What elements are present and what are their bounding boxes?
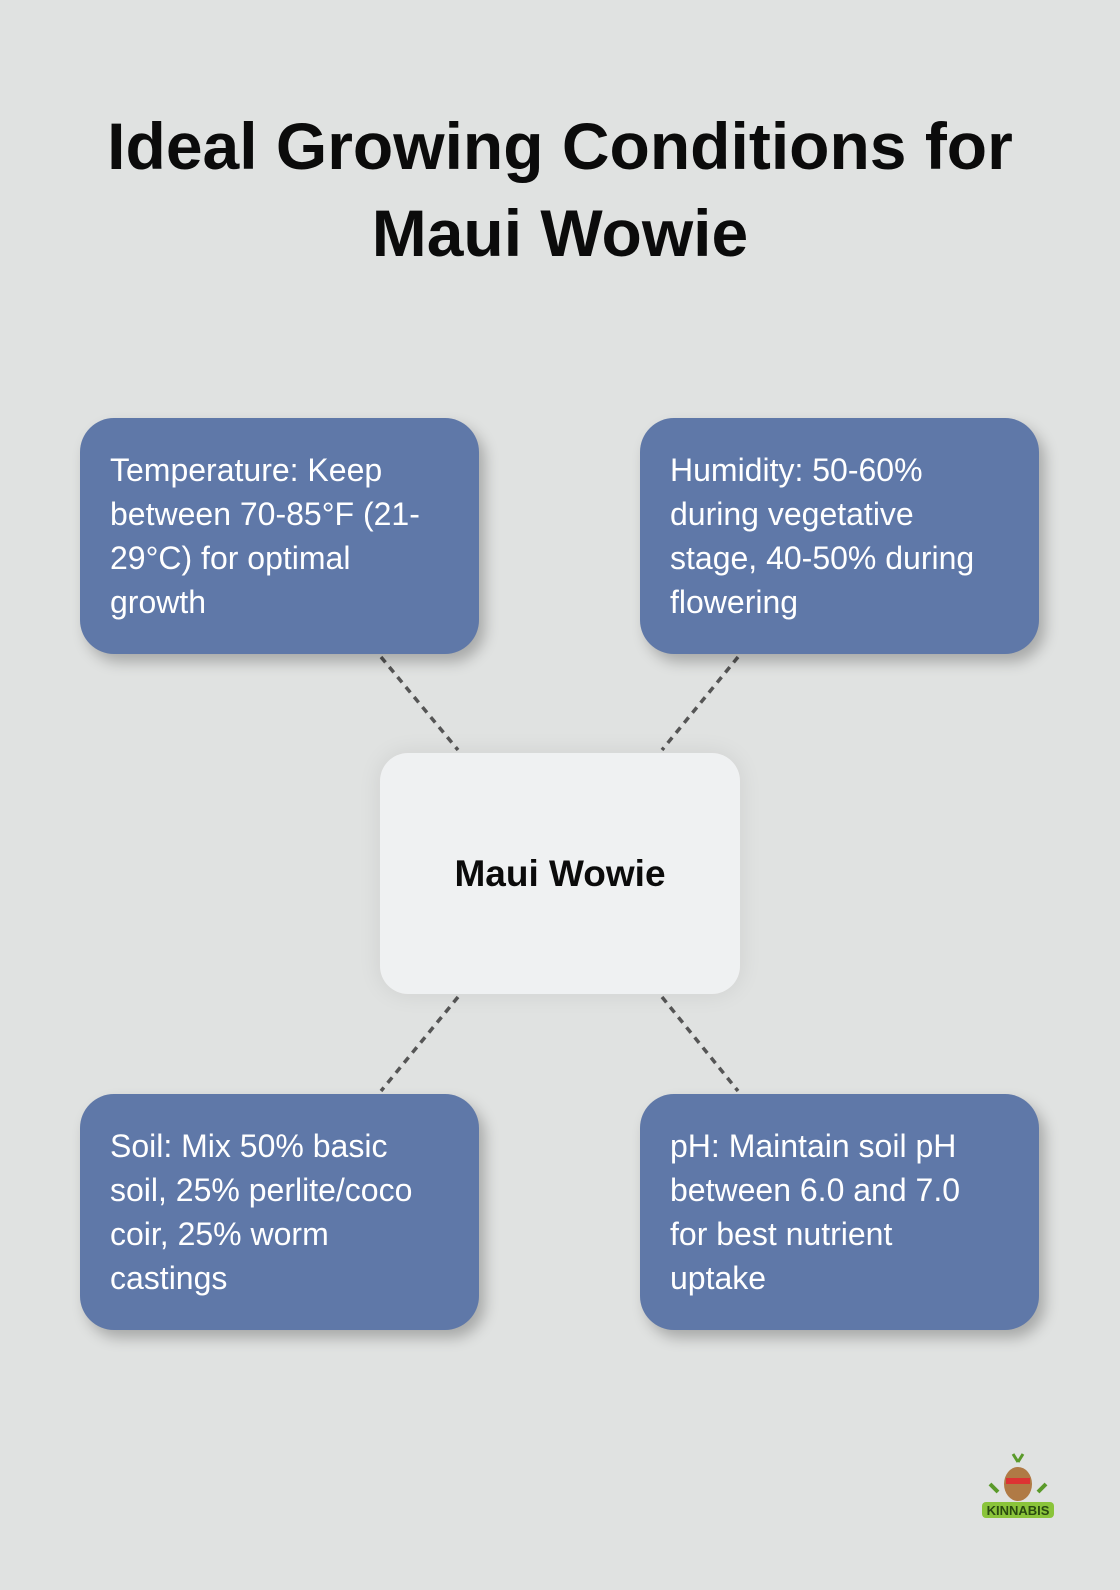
panel: humidity [640,418,1039,654]
center node: Maui Wowie [454,852,666,894]
title: Ideal Growing Conditions for [107,109,1013,183]
panel: soil: soil, 25% perlite/coco [110,1172,412,1208]
logo: KINNABIS [987,1503,1050,1518]
panel: pH: uptake [670,1260,766,1296]
panel: pH [640,1094,1039,1330]
title [107,109,1013,270]
panel: temperature: growth [110,584,206,620]
panel: humidity: Humidity: 50-60% [670,452,923,488]
panel: soil: coir, 25% worm [110,1216,329,1252]
panel: soil [80,1094,479,1330]
panel: temperature [80,418,479,654]
panel: temperature: between 70-85°F (21- [110,496,420,532]
logo [982,1453,1054,1518]
center node [380,753,740,994]
panel: pH: for best nutrient [670,1216,892,1252]
panel: soil: castings [110,1260,227,1296]
panel: pH: between 6.0 and 7.0 [670,1172,960,1208]
panel: pH: pH: Maintain soil pH [670,1128,956,1164]
panel: temperature: Temperature: Keep [110,452,382,488]
panel: humidity: flowering [670,584,798,620]
panel: humidity: stage, 40-50% during [670,540,974,576]
panel: humidity: during vegetative [670,496,914,532]
panel: soil: Soil: Mix 50% basic [110,1128,387,1164]
title: Maui Wowie [372,196,748,270]
panel: temperature: 29°C) for optimal [110,540,350,576]
